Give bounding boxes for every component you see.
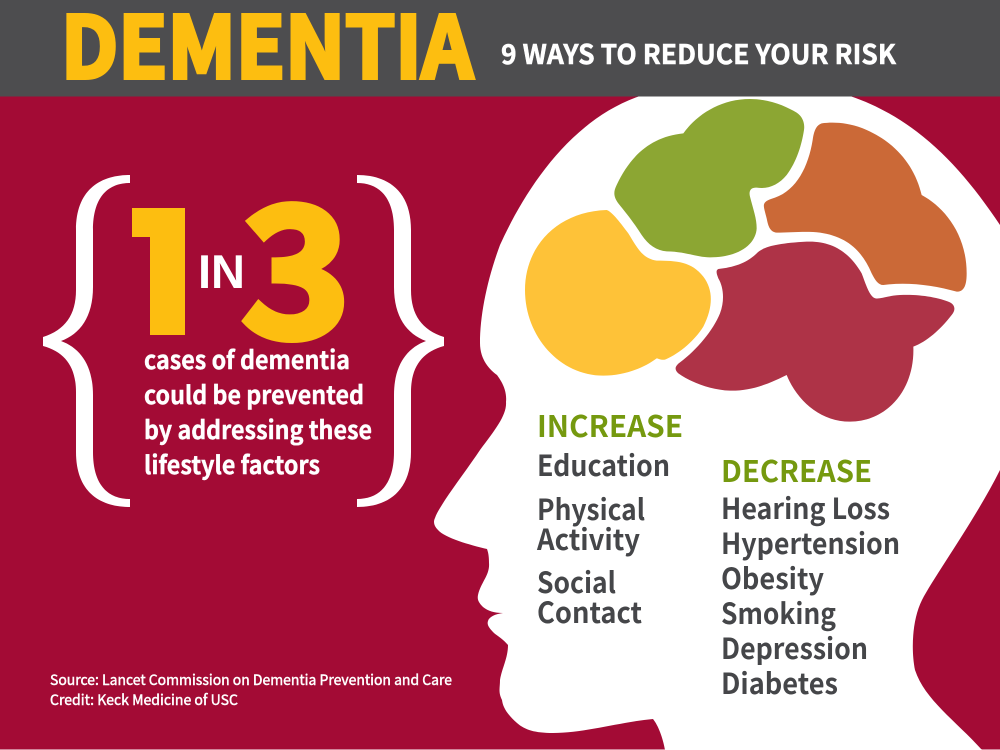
statistic description: lifestyle factors [144,446,320,482]
decrease items: Depression [721,626,868,668]
numeral 1: 1 [120,136,202,382]
increase items: Education [537,443,670,485]
statistic: 1 in 3 [132,201,344,343]
brain lobe: orange [764,123,967,292]
brain lobe: green [614,99,804,257]
subtitle: 9 WAYS TO REDUCE YOUR RISK [501,33,896,72]
statistic description: could be prevented [144,376,364,412]
brain lobe: yellow [525,210,711,376]
increase items: Physical [537,487,645,529]
right curly bracket [357,175,444,507]
source and credit: Source: Lancet Commission on Dementia Prevention and Care [50,669,452,690]
numeral 3: 3 [241,128,351,389]
decrease items [721,486,900,703]
increase list [536,402,683,632]
increase items: Social [537,560,616,602]
decrease items: Hearing Loss [721,486,890,528]
statistic description: by addressing these [144,411,372,447]
statistic description: cases of dementia [144,341,350,377]
decrease items: Hypertension [721,521,900,563]
increase items [536,443,670,632]
decrease items: Smoking [721,591,836,633]
statistic description [144,341,372,482]
left curly bracket [43,175,130,507]
increase items: Contact [537,590,642,632]
brain lobe: crimson [676,242,954,422]
head silhouette [434,96,1000,750]
source and credit: Credit: Keck Medicine of USC [50,689,238,710]
decrease heading: DECREASE [721,447,872,491]
increase items: Activity [536,517,640,559]
increase heading: INCREASE [537,402,683,446]
decrease items: Obesity [721,556,824,598]
source and credit [50,669,452,710]
word IN: IN [198,245,245,298]
decrease items: Diabetes [721,661,838,703]
decrease list [721,447,900,703]
header bar [0,0,1000,103]
brain illustration [525,99,967,422]
